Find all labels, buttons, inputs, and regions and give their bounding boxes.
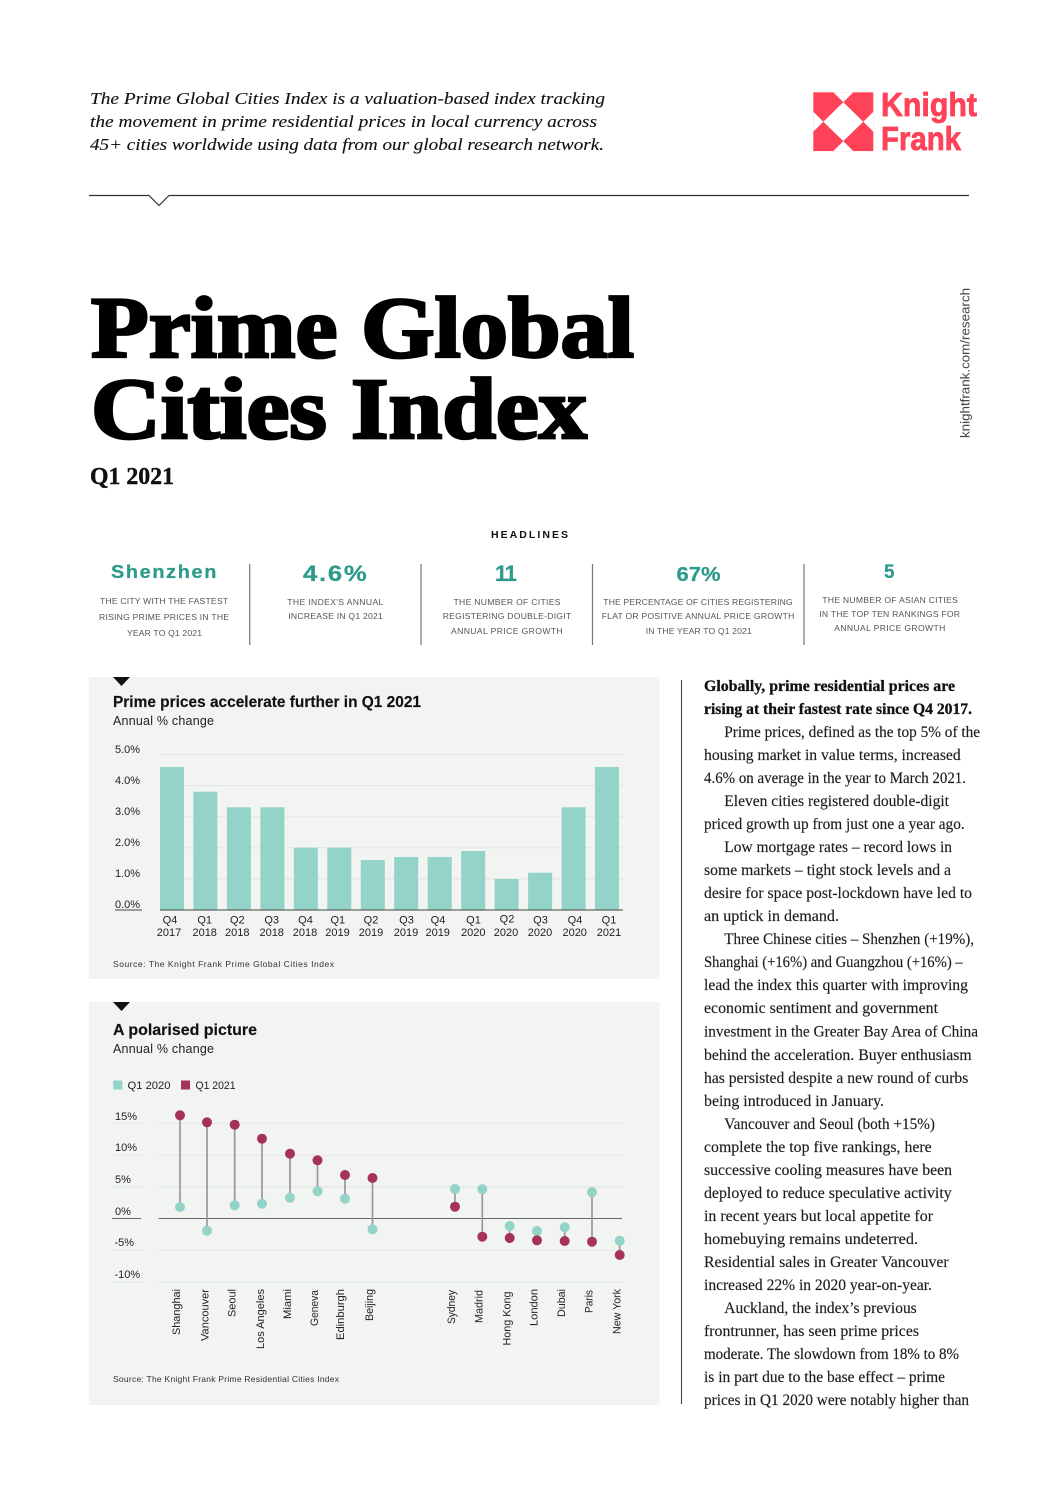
- legend: Q1 2020: [128, 1080, 170, 1092]
- logo: Knight Frank: Frank: [881, 120, 962, 157]
- article body text: housing market in value terms, increased: [704, 747, 961, 764]
- stat: Shenzhen: YEAR TO Q1 2021: [127, 628, 202, 638]
- dots: Q1 2021: [175, 1110, 625, 1260]
- headline stats: [99, 561, 960, 645]
- stat: 5: THE NUMBER OF ASIAN CITIES: [822, 595, 958, 605]
- y axis labels: 0.0%: [115, 899, 140, 911]
- stat: Shenzhen: [99, 562, 229, 638]
- column divider rule: [680, 680, 682, 1404]
- stat: 5: 5: [884, 562, 895, 583]
- x axis labels: 2018: [293, 927, 317, 939]
- y axis labels: 0%: [115, 1206, 131, 1218]
- city labels: Paris: [583, 1290, 595, 1313]
- city labels: Edinburgh: [335, 1289, 347, 1340]
- x axis labels: Q3: [399, 914, 414, 926]
- x axis labels: 2020: [562, 927, 587, 939]
- city labels: Dubai: [556, 1289, 568, 1317]
- stat: 11: 11: [495, 561, 517, 586]
- y axis labels: 15%: [115, 1111, 137, 1123]
- stat: 4.6%: INCREASE IN Q1 2021: [288, 611, 383, 621]
- stems: [180, 1115, 620, 1255]
- article body text: moderate. The slowdown from 18% to 8%: [704, 1346, 959, 1363]
- city labels: Los Angeles: [255, 1289, 267, 1349]
- intro text: the movement in prime residential prices in local currency across: [90, 112, 597, 131]
- y axis labels: [114, 1111, 140, 1281]
- x axis labels: 2018: [225, 927, 250, 939]
- article body text: desire for space post-lockdown have led to: [704, 885, 972, 902]
- city labels: Geneva: [309, 1289, 321, 1326]
- article body text: economic sentiment and government: [704, 1000, 939, 1017]
- x axis labels: 2017: [157, 927, 181, 939]
- article body text: complete the top five rankings, here: [704, 1139, 932, 1156]
- intro text: [90, 89, 605, 154]
- dots: Q1 2020: [175, 1184, 625, 1246]
- x axis labels: Q1: [197, 914, 212, 926]
- x axis labels: [157, 914, 621, 939]
- city labels: Vancouver: [200, 1289, 212, 1341]
- x axis labels: Q2: [230, 914, 245, 926]
- article body text: increased 22% in 2020 year-on-year.: [704, 1277, 932, 1294]
- article body text: 4.6% on average in the year to March 2021.: [704, 770, 966, 787]
- x axis labels: Q2: [500, 914, 514, 926]
- article body text: prices in Q1 2020 were notably higher than: [704, 1392, 969, 1409]
- stat: 67%: THE PERCENTAGE OF CITIES REGISTERING: [603, 597, 793, 607]
- article body text: some markets – tight stock levels and a: [704, 862, 951, 879]
- article body text: investment in the Greater Bay Area of China: [704, 1024, 978, 1040]
- stat: 67%: IN THE YEAR TO Q1 2021: [646, 626, 752, 636]
- article body text: homebuying remains undeterred.: [704, 1231, 918, 1248]
- city labels: Seoul: [227, 1289, 239, 1317]
- article body text: in recent years but local appetite for: [704, 1208, 934, 1225]
- stat: Shenzhen: RISING PRIME PRICES IN THE: [99, 612, 229, 622]
- stat: Shenzhen: Shenzhen: [111, 562, 218, 582]
- stat: 4.6%: [287, 561, 384, 621]
- x axis labels: 2020: [461, 927, 486, 939]
- logo: Knight Frank: [813, 86, 977, 157]
- panel marker triangle: [113, 677, 130, 686]
- x axis labels: Q3: [533, 914, 548, 926]
- x axis labels: Q4: [163, 914, 177, 926]
- stat: 67%: [602, 564, 794, 636]
- website vertical text: knightfrank.com/research: [958, 288, 972, 438]
- source note: Source: The Knight Frank Prime Residential Cities Index: [113, 1374, 340, 1384]
- panel marker triangle: [113, 1002, 130, 1011]
- x axis labels: 2018: [259, 927, 284, 939]
- stat: 11: [443, 561, 572, 636]
- y axis labels: [115, 744, 140, 911]
- chart subheading: Annual % change: [113, 714, 214, 728]
- article body text: successive cooling measures have been: [704, 1162, 952, 1179]
- bars: [160, 767, 619, 910]
- city labels: Sydney: [446, 1290, 458, 1324]
- source note: Source: The Knight Frank Prime Global Cities Index: [113, 959, 335, 969]
- article body text: has persisted despite a new round of curbs: [704, 1070, 968, 1087]
- y axis labels: 5%: [115, 1174, 131, 1186]
- article body text: lead the index this quarter with improving: [704, 977, 968, 994]
- city labels: Hong Kong: [502, 1292, 514, 1346]
- article body text: Three Chinese cities – Shenzhen (+19%),: [724, 931, 974, 948]
- stat: 11: ANNUAL PRICE GROWTH: [451, 626, 563, 636]
- article lead: Globally, prime residential prices are: [704, 678, 955, 695]
- article body text: frontrunner, has seen prime prices: [704, 1323, 919, 1340]
- intro text: 45+ cities worldwide using data from our global research network.: [90, 135, 604, 154]
- article body text: Prime prices, defined as the top 5% of the: [724, 724, 980, 741]
- article lead: rising at their fastest rate since Q4 2017.: [704, 701, 972, 718]
- title: Cities Index: [91, 360, 588, 457]
- stat: Shenzhen: THE CITY WITH THE FASTEST: [100, 596, 229, 606]
- chart heading: A polarised picture: [113, 1022, 257, 1039]
- chart heading: Prime prices accelerate further in Q1 2021: [113, 694, 421, 711]
- y axis labels: -10%: [114, 1269, 140, 1281]
- article body text: Low mortgage rates – record lows in: [724, 839, 952, 856]
- x axis labels: 2021: [597, 927, 621, 939]
- article body text: behind the acceleration. Buyer enthusiasm: [704, 1047, 972, 1064]
- intro text: The Prime Global Cities Index is a valuation-based index tracking: [90, 89, 605, 108]
- city labels: New York: [612, 1289, 624, 1334]
- city labels: [171, 1289, 624, 1349]
- city labels: Shanghai: [171, 1289, 183, 1335]
- stat: 11: THE NUMBER OF CITIES: [454, 597, 561, 607]
- subtitle: Q1 2021: Q1 2021: [90, 464, 174, 490]
- stat: 67%: FLAT OR POSITIVE ANNUAL PRICE GROWTH: [602, 611, 794, 621]
- article body text: an uptick in demand.: [704, 908, 839, 925]
- article lead: [704, 678, 972, 718]
- city labels: Beijing: [364, 1289, 376, 1321]
- y axis labels: 1.0%: [115, 868, 140, 880]
- article body text: Shanghai (+16%) and Guangzhou (+16%) –: [704, 954, 964, 971]
- x axis labels: 2019: [425, 927, 450, 939]
- y axis labels: 4.0%: [115, 775, 140, 787]
- article body text: [704, 678, 980, 1409]
- stat: 4.6%: 4.6%: [303, 561, 368, 586]
- y axis labels: 3.0%: [115, 806, 140, 818]
- article body text: Residential sales in Greater Vancouver: [704, 1254, 949, 1271]
- city labels: Madrid: [473, 1290, 485, 1323]
- x axis labels: Q3: [264, 914, 279, 926]
- y axis labels: 5.0%: [115, 744, 140, 756]
- stat: 4.6%: THE INDEX'S ANNUAL: [287, 597, 384, 607]
- article body text: Vancouver and Seoul (both +15%): [724, 1116, 935, 1133]
- legend: Q1 2021: [196, 1080, 236, 1092]
- x axis labels: Q1: [466, 914, 481, 926]
- article body text: deployed to reduce speculative activity: [704, 1185, 952, 1202]
- article body text: is in part due to the base effect – prime: [704, 1369, 945, 1386]
- stat: 11: REGISTERING DOUBLE-DIGIT: [443, 611, 572, 621]
- title: [91, 279, 634, 457]
- stat: 5: [819, 562, 960, 633]
- header rule with notch: [89, 196, 969, 206]
- title: Prime Global: [91, 279, 634, 376]
- panel: polarised picture dot chart: [89, 1002, 660, 1405]
- legend: [113, 1080, 236, 1092]
- x axis labels: 2019: [359, 927, 383, 939]
- x axis labels: 2018: [192, 927, 217, 939]
- article body text: Auckland, the index’s previous: [724, 1300, 917, 1317]
- stat: 5: ANNUAL PRICE GROWTH: [834, 623, 945, 633]
- x axis labels: 2020: [528, 927, 552, 939]
- article body text: being introduced in January.: [704, 1093, 884, 1110]
- logo: Knight Frank: Knight: [881, 86, 977, 123]
- x axis labels: 2019: [394, 927, 418, 939]
- x axis labels: 2020: [494, 927, 518, 939]
- chart subheading: Annual % change: [113, 1042, 214, 1056]
- panel: prime prices bar chart: [89, 677, 660, 979]
- x axis labels: Q1: [602, 914, 616, 926]
- x axis labels: Q4: [568, 914, 582, 926]
- stat: 5: IN THE TOP TEN RANKINGS FOR: [819, 609, 960, 619]
- x axis labels: Q2: [364, 914, 378, 926]
- stat: 67%: 67%: [676, 564, 721, 586]
- x axis labels: Q4: [298, 914, 313, 926]
- x axis labels: 2019: [325, 927, 350, 939]
- article body text: Eleven cities registered double-digit: [724, 793, 950, 810]
- city labels: London: [528, 1289, 540, 1326]
- article body text: priced growth up from just one a year ago.: [704, 816, 965, 833]
- y axis labels: 10%: [115, 1142, 137, 1154]
- x axis labels: Q4: [431, 914, 445, 926]
- y axis labels: -5%: [114, 1237, 134, 1249]
- x axis labels: Q1: [330, 914, 345, 926]
- city labels: Miami: [282, 1289, 294, 1319]
- headlines heading: HEADLINES: [491, 529, 568, 541]
- y axis labels: 2.0%: [115, 837, 140, 849]
